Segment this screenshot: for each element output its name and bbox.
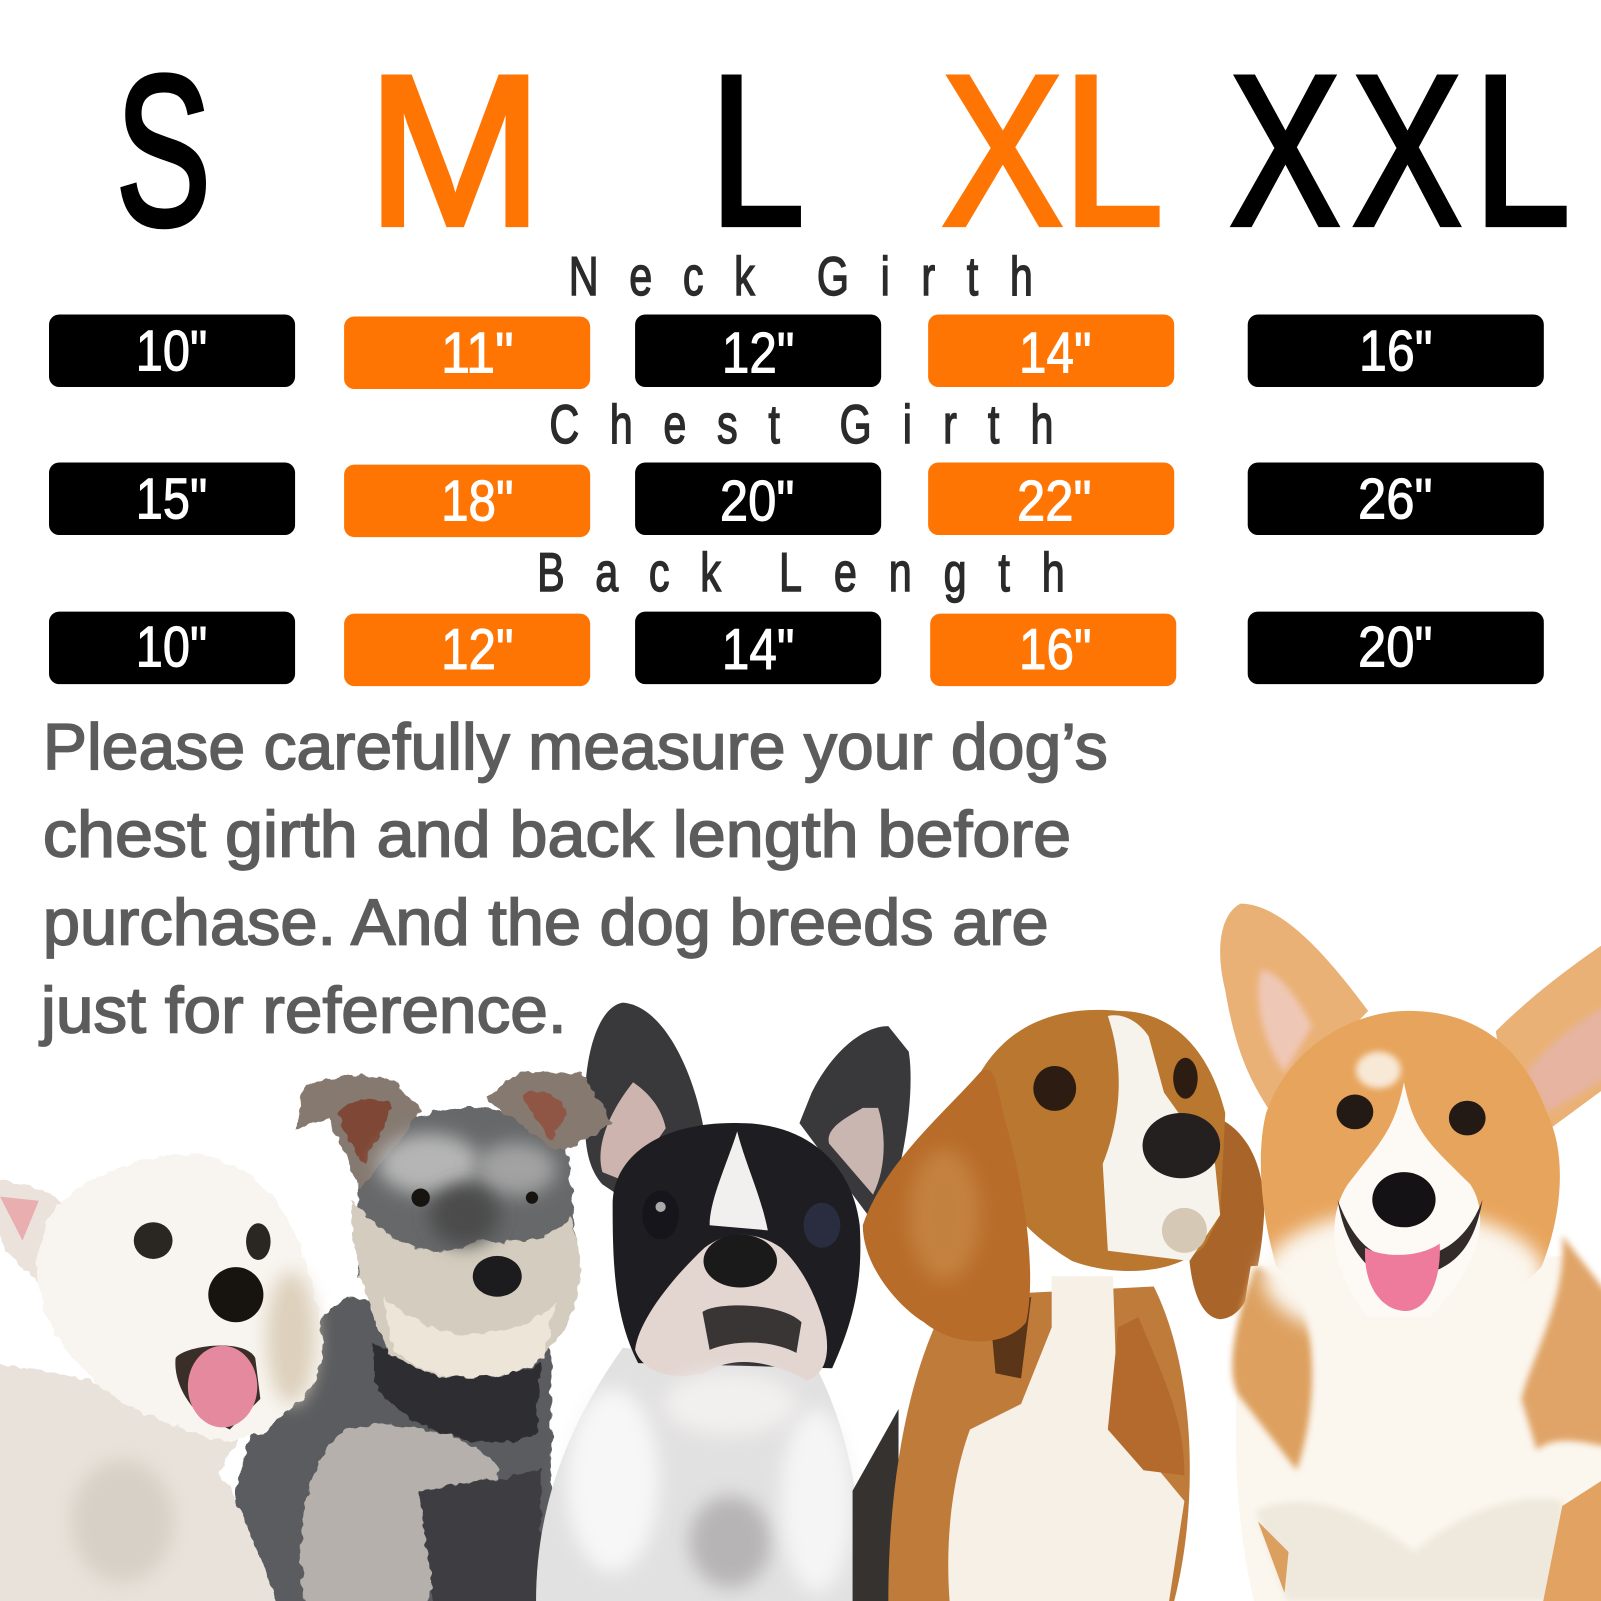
size XXL: L	[1473, 32, 1570, 271]
chest girth row: 18"	[441, 470, 514, 534]
neck girth row	[49, 314, 1544, 389]
back length row: 10"	[136, 616, 207, 680]
dog: schnauzer	[222, 1074, 580, 1601]
size M: M	[367, 32, 543, 271]
chest girth row: 26"	[1358, 468, 1433, 532]
dog: corgi	[1220, 904, 1601, 1601]
back length row	[49, 612, 1544, 686]
back length heading: Back	[537, 543, 752, 604]
size XL: XL	[942, 32, 1163, 271]
chest girth row: 20"	[720, 470, 794, 534]
chest girth row: 22"	[1017, 470, 1091, 534]
neck girth heading: Neck	[569, 246, 785, 308]
size L: L	[710, 32, 805, 271]
measuring note: just for reference.	[39, 973, 567, 1046]
size XXL	[1230, 32, 1570, 271]
measuring note	[39, 710, 1108, 1046]
back length row: 12"	[441, 618, 514, 682]
neck girth row: 14"	[1019, 322, 1091, 386]
neck girth heading: Girth	[817, 246, 1065, 308]
back length row: 14"	[722, 618, 794, 682]
chest girth row	[49, 463, 1544, 537]
size XXL: X	[1230, 32, 1340, 271]
dog: westie	[0, 1154, 323, 1601]
chest girth heading: Girth	[840, 394, 1085, 456]
neck girth row: 16"	[1359, 320, 1433, 384]
size XXL: X	[1352, 32, 1462, 271]
size headings	[116, 32, 1570, 271]
back length row: 20"	[1358, 616, 1433, 680]
measuring note: chest girth and back length before	[43, 798, 1071, 871]
measuring note: purchase. And the dog breeds are	[43, 885, 1049, 958]
dog: french bulldog	[536, 1003, 911, 1601]
neck girth row: 12"	[722, 322, 794, 386]
size S: S	[116, 32, 211, 271]
chest girth row: 15"	[136, 468, 207, 532]
schnauzer right ear	[485, 1072, 613, 1149]
measuring note: Please carefully measure your dog’s	[43, 710, 1108, 783]
back length row: 16"	[1019, 618, 1091, 682]
back length heading: Length	[779, 543, 1097, 604]
chest girth heading: Chest	[549, 394, 810, 456]
neck girth row: 11"	[441, 322, 514, 386]
neck girth row: 10"	[136, 320, 207, 384]
dog: beagle	[853, 1010, 1264, 1601]
